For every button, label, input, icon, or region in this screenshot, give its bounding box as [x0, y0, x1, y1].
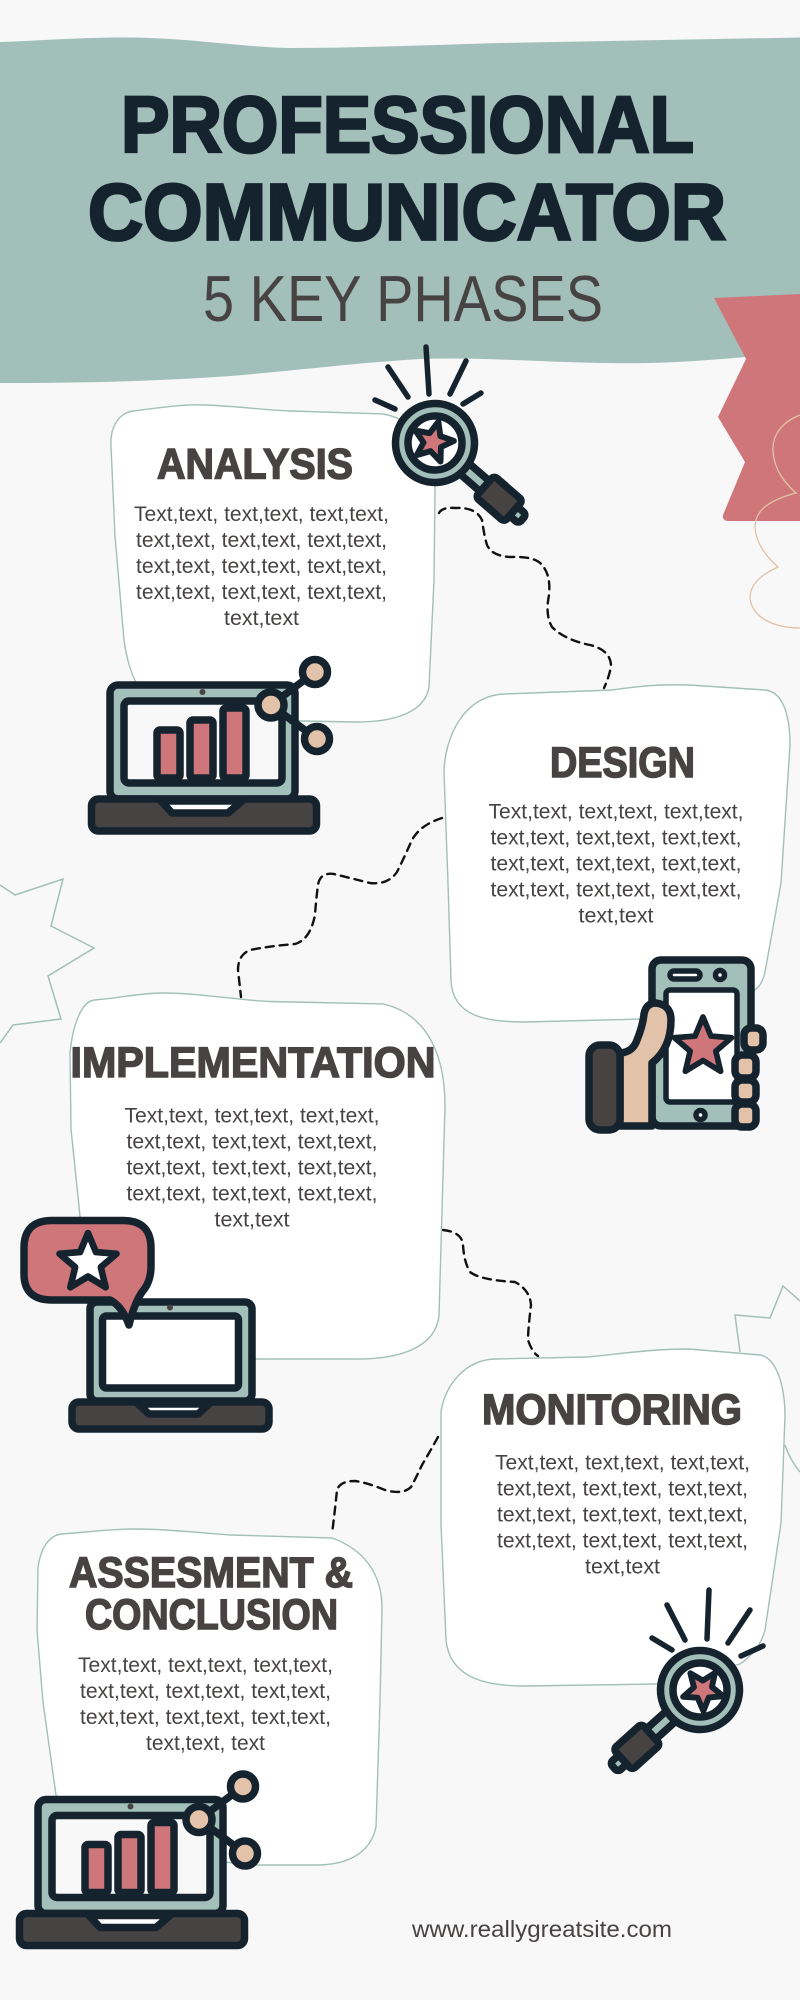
pink torn ribbon [714, 294, 800, 521]
header banner [0, 37, 800, 383]
icon: magnifier top [375, 347, 548, 549]
icon: magnifier bottom [587, 1590, 763, 1797]
panel: assesment and conclusion: text,text, text,text, text,text, [80, 1706, 331, 1729]
panel: analysis [111, 405, 435, 722]
panel: assesment and conclusion [37, 1529, 382, 1865]
panel: analysis: text,text, text,text, text,text, [136, 529, 387, 552]
panel: analysis: ANALYSIS [157, 440, 353, 488]
peach squiggle line [750, 415, 800, 628]
panel: design: text,text, text,text, text,text, [490, 878, 742, 902]
panel: implementation: Text,text, text,text, text,text, [124, 1104, 380, 1128]
connector: monitoring to assesment [332, 1437, 438, 1534]
title: PROFESSIONAL [121, 80, 694, 169]
panel: implementation: text,text, text,text, text,text, [126, 1182, 378, 1206]
panel: design: Text,text, text,text, text,text, [488, 800, 744, 824]
subtitle: 5 KEY PHASES [203, 262, 603, 335]
panel: assesment and conclusion: ASSESMENT & [69, 1549, 353, 1597]
panel: monitoring: text,text, text,text, text,text, [497, 1504, 748, 1527]
panel: implementation [70, 993, 445, 1359]
connector: analysis to design [439, 508, 611, 688]
panel: analysis: text,text, text,text, text,text, [136, 581, 387, 604]
panel: design: DESIGN [550, 739, 695, 787]
icon: speech bubble with star [24, 1220, 151, 1325]
panel: assesment and conclusion: text,text, text [146, 1732, 265, 1755]
panel: implementation: text,text, text,text, text,text, [126, 1130, 378, 1154]
panel: assesment and conclusion: CONCLUSION [85, 1591, 338, 1639]
website url: www.reallygreatsite.com [411, 1916, 672, 1942]
panel: analysis: text,text, text,text, text,text, [136, 555, 387, 578]
title: COMMUNICATOR [88, 168, 726, 256]
icon: laptop with rating bubble [24, 1220, 269, 1429]
panel: assesment and conclusion: Text,text, text,text, text,text, [78, 1654, 333, 1677]
panel: design: text,text, text,text, text,text, [490, 826, 742, 850]
panel: monitoring: text,text, text,text, text,text, [497, 1478, 748, 1501]
panel: implementation: text,text, text,text, text,text, [126, 1156, 378, 1180]
icon: laptop with bar chart (conclusion) [20, 1774, 258, 1946]
panel: implementation: IMPLEMENTATION [70, 1039, 436, 1087]
panel: monitoring [441, 1349, 785, 1686]
icon: laptop with bar chart (analysis) [92, 660, 330, 831]
panel: design [444, 685, 790, 1022]
panel: monitoring: MONITORING [482, 1386, 742, 1434]
panel: analysis: text,text [224, 607, 299, 630]
panel: monitoring: text,text, text,text, text,text, [497, 1530, 748, 1553]
title [88, 80, 726, 256]
panel: monitoring: Text,text, text,text, text,text, [495, 1452, 750, 1475]
panel: analysis: Text,text, text,text, text,text, [134, 503, 389, 526]
panel: assesment and conclusion: text,text, text,text, text,text, [80, 1680, 331, 1703]
connector: implementation to monitoring [443, 1230, 538, 1356]
connector: design to implementation [238, 818, 442, 997]
panel: design: text,text, text,text, text,text, [490, 852, 742, 876]
icon: smartphone in hand [589, 960, 763, 1130]
panel: monitoring: text,text [585, 1556, 660, 1579]
panel: design: text,text [578, 904, 654, 928]
panel: implementation: text,text [214, 1208, 290, 1232]
